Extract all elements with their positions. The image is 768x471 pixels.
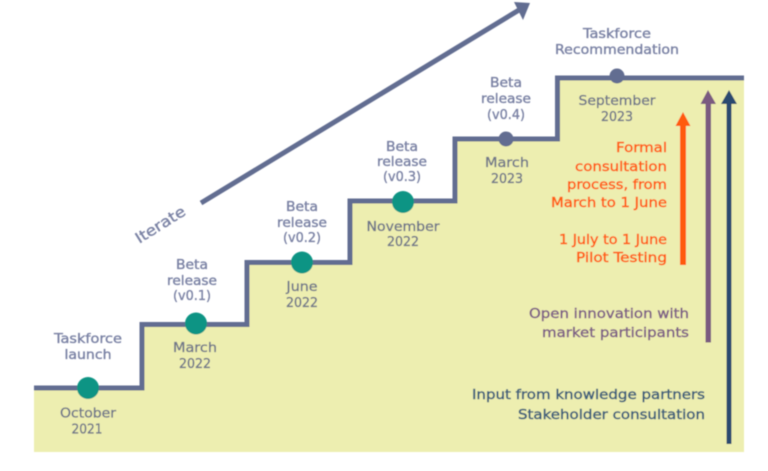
milestone: Taskforce Recommendation, September 2023 bbox=[555, 26, 679, 125]
orange text: pilot testing: Pilot Testing bbox=[576, 250, 667, 266]
milestone: Beta release v0.4, March 2023: 2023 bbox=[491, 171, 523, 187]
purple text: open innovation bbox=[529, 306, 689, 341]
orange text: formal consultation: March to 1 June bbox=[551, 195, 667, 211]
milestone: Beta release v0.2, June 2022: (v0.2) bbox=[283, 230, 321, 246]
milestone: Beta release v0.3, November 2022 bbox=[366, 139, 440, 250]
purple text: open innovation: market participants bbox=[542, 325, 689, 341]
orange text: formal consultation: Formal bbox=[616, 140, 667, 156]
navy text: partner input and stakeholder consultation bbox=[472, 387, 705, 423]
navy text: partner input and stakeholder consultation: Stakeholder consultation bbox=[518, 407, 705, 423]
milestone: Taskforce Recommendation, September 2023: September bbox=[578, 93, 656, 109]
milestone: Beta release v0.2, June 2022 bbox=[277, 199, 327, 311]
milestone: Beta release v0.4, March 2023 bbox=[481, 75, 531, 187]
orange text: pilot testing: 1 July to 1 June bbox=[559, 232, 667, 248]
milestone: Beta release v0.1, March 2022: Beta bbox=[176, 257, 208, 273]
milestone: Beta release v0.4, March 2023: (v0.4) bbox=[487, 107, 525, 123]
milestone: Beta release v0.4, March 2023: March bbox=[485, 155, 529, 171]
milestone: Taskforce launch, October 2021: October bbox=[60, 406, 116, 422]
iterate label: Iterate bbox=[132, 202, 189, 247]
milestone: Taskforce Recommendation, September 2023: Taskforce bbox=[582, 26, 651, 42]
milestone: Beta release v0.2, June 2022: 2022 bbox=[286, 295, 318, 311]
orange text: formal consultation: process, from bbox=[567, 177, 667, 193]
milestone: Beta release v0.1, March 2022: 2022 bbox=[179, 356, 211, 372]
milestone: Beta release v0.1, March 2022: release bbox=[167, 273, 217, 289]
yellow area under staircase bbox=[34, 78, 744, 452]
navy text: partner input and stakeholder consultation: Input from knowledge partners bbox=[472, 387, 705, 403]
milestone: Beta release v0.1, March 2022: March bbox=[173, 340, 217, 356]
milestone: Beta release v0.2, June 2022: release bbox=[277, 215, 327, 231]
iterate arrow bbox=[201, 2, 530, 203]
orange text: formal consultation bbox=[551, 140, 667, 211]
milestone: Beta release v0.3, November 2022: November bbox=[366, 219, 440, 235]
navy arrow: stakeholder input bbox=[721, 90, 737, 444]
milestone: Beta release v0.3, November 2022: (v0.3) bbox=[383, 169, 421, 185]
purple text: open innovation: Open innovation with bbox=[529, 306, 689, 322]
milestone: Beta release v0.3, November 2022: release bbox=[377, 154, 427, 170]
purple arrow: open innovation bbox=[700, 90, 716, 342]
staircase line bbox=[34, 78, 744, 388]
milestone: Beta release v0.1, March 2022: (v0.1) bbox=[173, 288, 211, 304]
orange text: formal consultation: consultation bbox=[575, 159, 667, 175]
milestone: Beta release v0.1, March 2022 bbox=[167, 257, 217, 372]
milestone: Beta release v0.3, November 2022: Beta bbox=[386, 139, 418, 155]
orange arrow: formal consultation bbox=[676, 112, 690, 265]
milestone: Taskforce launch, October 2021: 2021 bbox=[72, 422, 102, 438]
milestone: Beta release v0.2, June 2022: June bbox=[285, 279, 318, 295]
milestone: Taskforce launch, October 2021: Taskforce bbox=[53, 331, 122, 347]
milestone: Taskforce Recommendation, September 2023: 2023 bbox=[601, 109, 633, 125]
milestone: Taskforce Recommendation, September 2023: Recommendation bbox=[555, 42, 679, 58]
milestone: Taskforce launch, October 2021 bbox=[53, 331, 122, 438]
orange text: pilot testing bbox=[559, 232, 667, 266]
milestone: Beta release v0.4, March 2023: Beta bbox=[490, 75, 522, 91]
milestone: Beta release v0.2, June 2022: Beta bbox=[286, 199, 318, 215]
milestone: Taskforce launch, October 2021: launch bbox=[64, 347, 112, 363]
milestone: Beta release v0.4, March 2023: release bbox=[481, 91, 531, 107]
milestone: Beta release v0.3, November 2022: 2022 bbox=[387, 234, 419, 250]
